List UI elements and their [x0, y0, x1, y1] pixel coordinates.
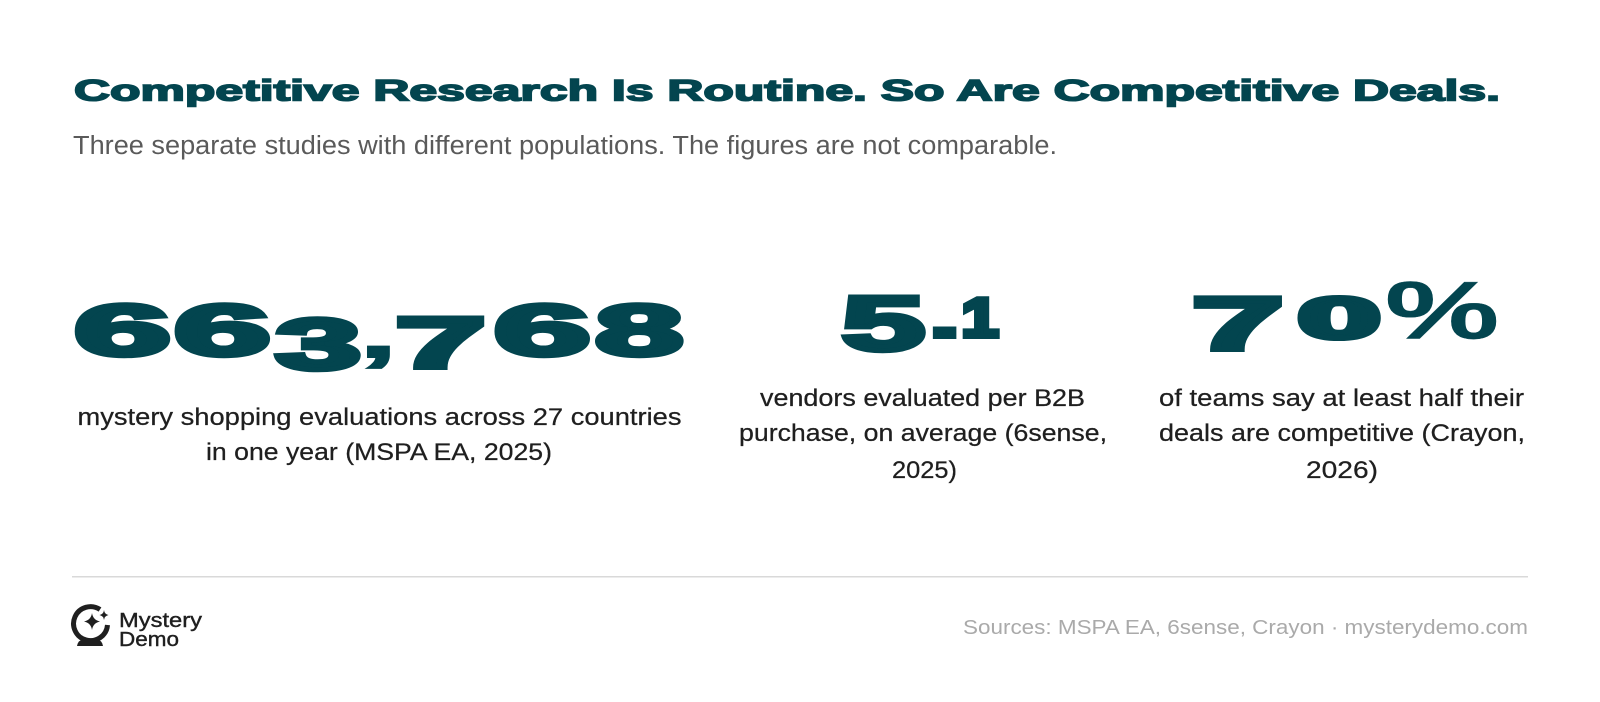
stat: 70%	[1159, 264, 1525, 484]
stat: 5.1	[739, 281, 1107, 484]
stat caption: teams: of teams say at least half their	[1159, 385, 1524, 412]
stat number: 70%: 7	[1192, 282, 1284, 366]
stat caption: vendors: purchase, on average (6sense,	[739, 420, 1107, 447]
stat number: 663,768: 6	[174, 290, 270, 371]
stat caption: evaluations	[78, 404, 682, 466]
stat number: 70%	[1192, 264, 1499, 366]
title: Competitive Research Is Routine. So Are Competitive Deals.	[74, 74, 1500, 108]
stat number: 5.1: 5	[842, 281, 925, 367]
sources: Sources: MSPA EA, 6sense, Crayon · mysterydemo.com	[963, 616, 1528, 639]
stat number: 5.1: .	[931, 292, 958, 347]
stat caption: evaluations: in one year (MSPA EA, 2025)	[206, 439, 552, 466]
stat caption: teams	[1159, 385, 1525, 484]
stat number: 5.1: 1	[962, 287, 999, 349]
logo wordmark: Mystery	[119, 609, 203, 632]
stat number: 5.1	[842, 281, 999, 367]
stat number: 663,768: 6	[494, 290, 590, 371]
stat number: 663,768: 7	[396, 303, 486, 383]
stat caption: vendors	[739, 385, 1107, 484]
stat number: 70%: 0	[1298, 286, 1381, 351]
stat caption: teams: 2026)	[1306, 457, 1378, 484]
stat: 663,768	[74, 290, 683, 466]
logo	[74, 607, 203, 651]
stat number: 663,768: 3	[276, 304, 361, 385]
stat number: 70%: %	[1385, 264, 1499, 356]
logo wordmark	[119, 609, 203, 651]
stat number: 663,768: 6	[74, 290, 171, 371]
subtitle: Three separate studies with different populations. The figures are not comparable.	[73, 132, 1057, 160]
stat caption: vendors: 2025)	[892, 457, 957, 484]
stat number: 663,768: ,	[360, 294, 397, 372]
stat number: 663,768: 8	[595, 290, 683, 371]
logo wordmark: Demo	[119, 628, 179, 651]
stat caption: teams: deals are competitive (Crayon,	[1159, 420, 1525, 447]
stat caption: evaluations: mystery shopping evaluations across 27 countries	[78, 404, 682, 431]
stat caption: vendors: vendors evaluated per B2B	[760, 385, 1085, 412]
stat number: 663,768	[74, 290, 683, 385]
icon: crystal ball	[74, 607, 108, 646]
